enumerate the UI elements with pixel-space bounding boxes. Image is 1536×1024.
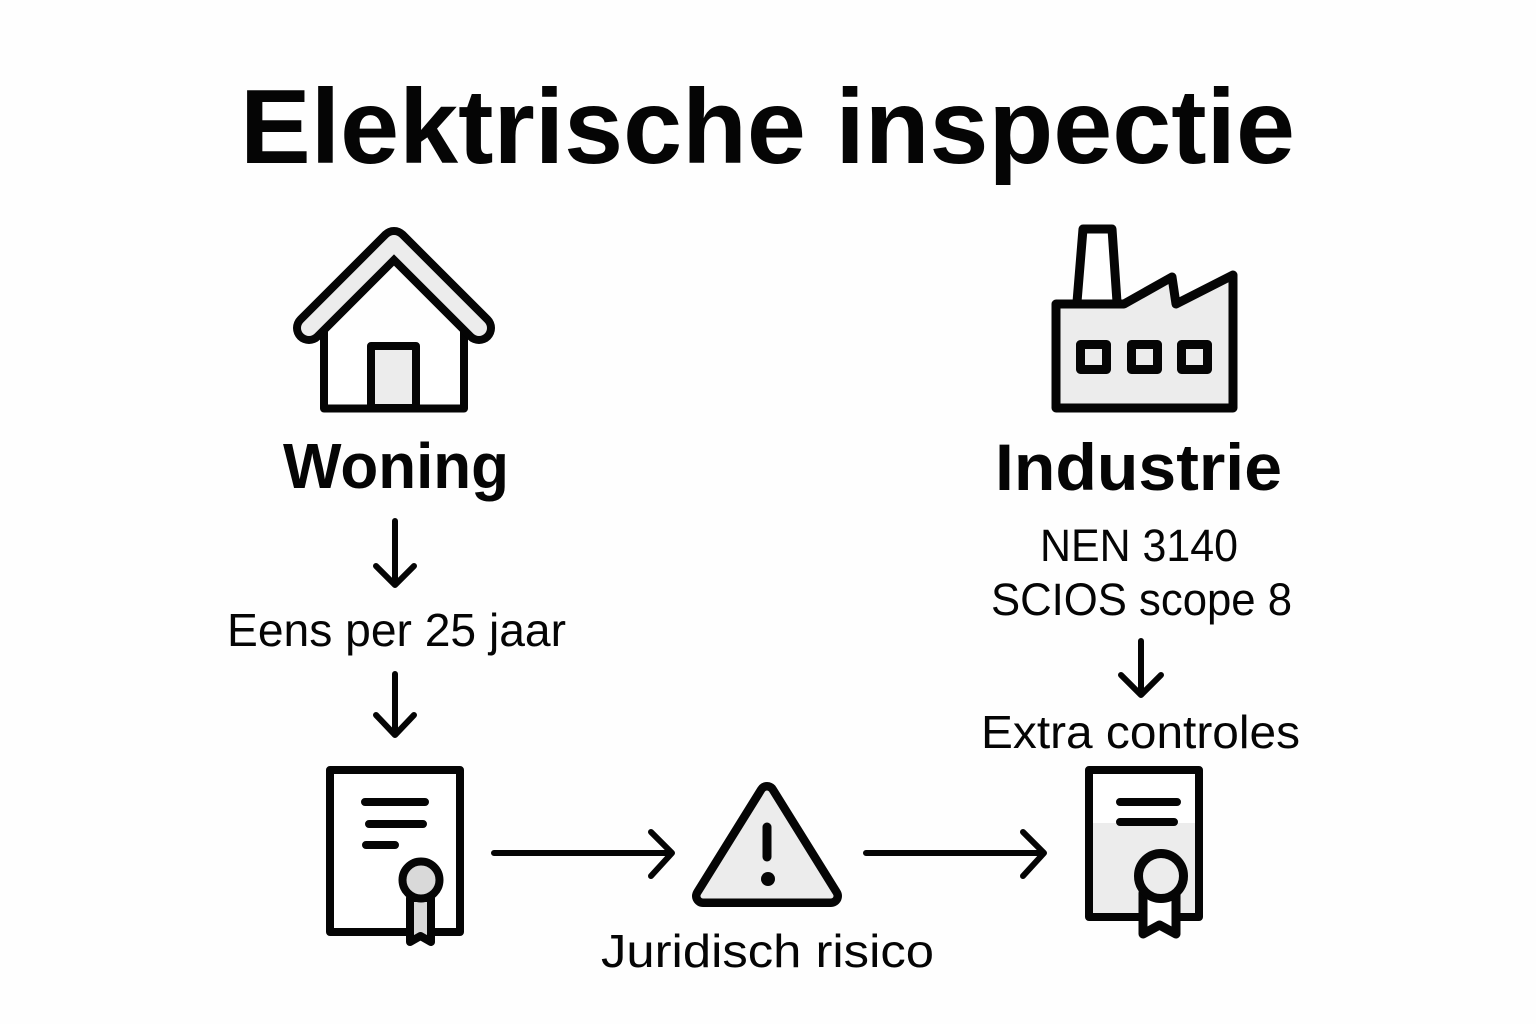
text: extra checks: Extra controles	[981, 706, 1300, 758]
icon: factory	[1056, 229, 1233, 408]
icon: warning triangle	[703, 793, 831, 896]
heading: Woning: Woning	[283, 430, 509, 502]
arrow: interval to certificate	[376, 674, 414, 735]
title: Elektrische inspectie	[240, 68, 1295, 186]
icon: house	[309, 243, 479, 408]
text: NEN 3140: NEN 3140	[1040, 520, 1238, 571]
icon: home certificate	[330, 770, 460, 942]
arrow: Woning to interval	[376, 521, 414, 585]
text: legal risk: Juridisch risico	[601, 925, 934, 977]
arrow: standards to extra checks	[1121, 641, 1161, 695]
text: interval: Eens per 25 jaar	[227, 604, 566, 656]
arrow: home certificate to risk	[494, 832, 672, 876]
icon: industry certificate	[1089, 770, 1199, 934]
heading: Industrie: Industrie	[995, 430, 1282, 504]
text: SCIOS scope 8: SCIOS scope 8	[991, 574, 1292, 625]
arrow: risk to industry certificate	[866, 832, 1044, 876]
